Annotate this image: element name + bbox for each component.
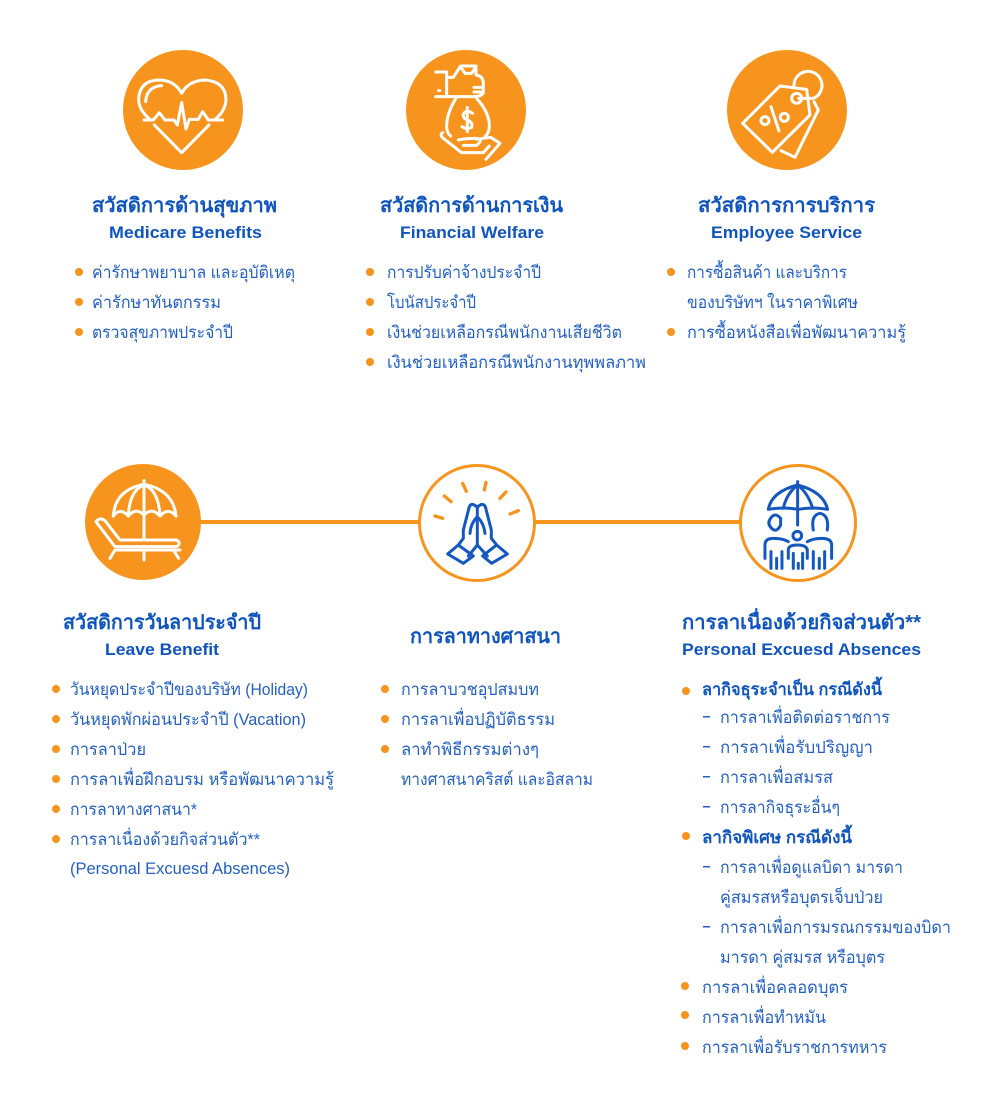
list: personal excused absences: การลาเพื่อติดต่อราชการ [720, 705, 890, 727]
list: personal excused absences: การลาเพื่อทำหมัน [702, 1005, 826, 1027]
list: personal excused absences: คู่สมรสหรือบุตรเจ็บป่วย [720, 886, 883, 908]
list: religious leave: ทางศาสนาคริสต์ และอิสลาม [401, 770, 593, 789]
heading: employee service: สวัสดิการการบริการ [698, 195, 875, 217]
subheading: financial welfare: Financial Welfare [400, 223, 544, 242]
list: personal excused absences: ลากิจธุระจำเป็น กรณีดังนี้ [702, 676, 882, 700]
heading: leave benefit: สวัสดิการวันลาประจำปี [63, 611, 261, 634]
list: personal excused absences: การลาเพื่อคลอดบุตร [702, 975, 848, 998]
panel: employee service [667, 50, 906, 343]
panel: personal excused absences [681, 466, 951, 1057]
list: leave benefit [52, 680, 334, 878]
icon: umbrella over family [740, 466, 856, 580]
list: religious leave: การลาเพื่อปฏิบัติธรรม [401, 707, 555, 729]
list: personal excused absences: ลากิจพิเศษ กรณีดังนี้ [702, 824, 852, 847]
list: financial welfare: เงินช่วยเหลือกรณีพนักงานทุพพลภาพ [387, 353, 646, 373]
icon: money bag in hand [406, 50, 526, 170]
list: employee service: การซื้อหนังสือเพื่อพัฒนาความรู้ [687, 320, 906, 343]
list: leave benefit: วันหยุดพักผ่อนประจำปี (Vacation) [70, 710, 306, 730]
list: leave benefit: (Personal Excuesd Absences) [70, 859, 290, 878]
subheading: employee service: Employee Service [711, 223, 862, 242]
list: leave benefit: การลาป่วย [70, 740, 146, 759]
panel: leave benefit [52, 464, 334, 878]
list: personal excused absences: การลาเพื่อรับปริญญา [720, 735, 873, 757]
heading: personal excused absences: การลาเนื่องด้วยกิจส่วนตัว** [682, 607, 921, 634]
list: leave benefit: การลาทางศาสนา* [70, 800, 197, 819]
heading: medicare benefits: สวัสดิการด้านสุขภาพ [92, 194, 277, 218]
list: personal excused absences: การลาเพื่อสมรส [720, 765, 834, 787]
subheading: medicare benefits: Medicare Benefits [109, 223, 262, 242]
list: employee service [667, 260, 906, 343]
list: leave benefit: การลาเนื่องด้วยกิจส่วนตัว** [70, 827, 260, 849]
icon: heart with pulse [123, 50, 243, 170]
list: personal excused absences: มารดา คู่สมรส หรือบุตร [720, 948, 885, 968]
list: medicare benefits: ค่ารักษาทันตกรรม [92, 293, 221, 312]
panel: financial welfare [366, 50, 646, 373]
panel: medicare benefits [75, 50, 295, 343]
list: personal excused absences: การลากิจธุระอื่นๆ [720, 795, 840, 818]
icon: praying hands [420, 466, 534, 580]
list: religious leave [381, 680, 593, 789]
list: personal excused absences: การลาเพื่อดูแลบิดา มารดา [720, 855, 903, 878]
list: leave benefit: วันหยุดประจำปีของบริษัท (Holiday) [70, 680, 308, 700]
list: financial welfare: การปรับค่าจ้างประจำปี [387, 263, 541, 282]
icon: beach umbrella and lounger [85, 464, 201, 580]
list: leave benefit: การลาเพื่อฝึกอบรม หรือพัฒนาความรู้ [70, 767, 334, 790]
connector line between leave icons [195, 520, 745, 524]
heading: financial welfare: สวัสดิการด้านการเงิน [380, 194, 563, 217]
subheading: personal excused absences: Personal Excuesd Absences [682, 640, 921, 659]
list: medicare benefits [75, 263, 295, 343]
list: personal excused absences: การลาเพื่อรับราชการทหาร [702, 1035, 887, 1057]
list: employee service: การซื้อสินค้า และบริการ [687, 260, 847, 282]
heading: religious leave: การลาทางศาสนา [410, 626, 561, 648]
list: financial welfare: เงินช่วยเหลือกรณีพนักงานเสียชีวิต [387, 323, 622, 342]
list: personal excused absences: การลาเพื่อการมรณกรรมของบิดา [720, 915, 951, 937]
list: employee service: ของบริษัทฯ ในราคาพิเศษ [687, 292, 858, 312]
list: medicare benefits: ค่ารักษาพยาบาล และอุบัติเหตุ [92, 263, 295, 283]
list: medicare benefits: ตรวจสุขภาพประจำปี [92, 323, 233, 343]
subheading: leave benefit: Leave Benefit [105, 640, 219, 659]
list: religious leave: การลาบวชอุปสมบท [401, 680, 539, 700]
list: personal excused absences [681, 676, 951, 1057]
panel: religious leave [381, 466, 593, 789]
list: religious leave: ลาทำพิธีกรรมต่างๆ [401, 740, 539, 759]
list: financial welfare: โบนัสประจำปี [387, 292, 476, 312]
list: financial welfare [366, 263, 646, 373]
icon: price tags [727, 50, 847, 170]
